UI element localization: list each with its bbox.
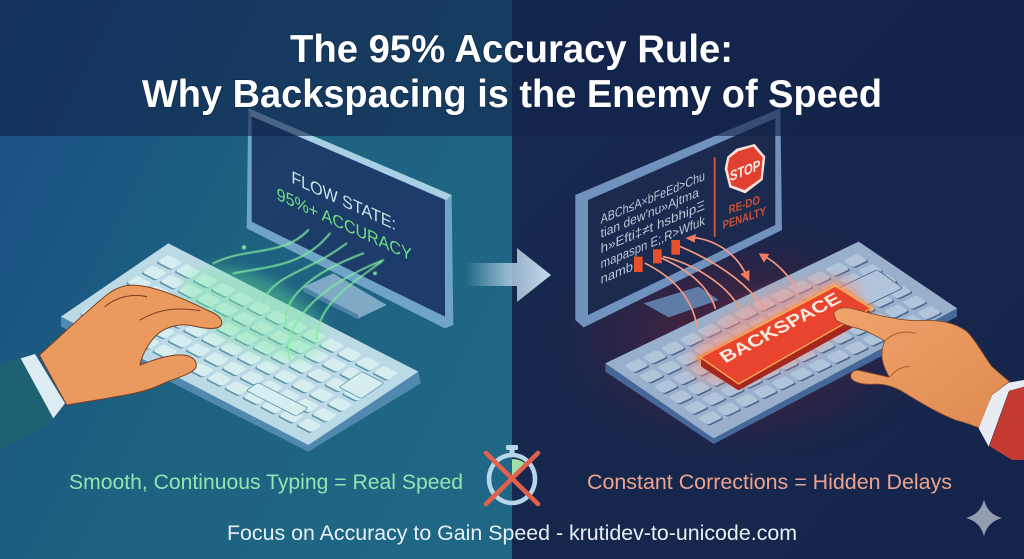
- right hand: [834, 308, 1009, 428]
- left panel background: [0, 0, 512, 559]
- left scene: flow state: [0, 108, 453, 452]
- caption: smooth typing: Smooth, Continuous Typing = Real Speed: [69, 471, 463, 494]
- garbled text line 1: ABCh≤A×bFeEd>Chu: [601, 168, 705, 227]
- garbled text line 5: namb: [601, 258, 633, 287]
- right keyboard: [605, 242, 957, 444]
- left keyboard: [61, 243, 421, 452]
- title band: [0, 0, 1024, 136]
- red correction arrows: [645, 234, 795, 327]
- stopwatch crossed out: [486, 445, 538, 504]
- right panel background: [512, 0, 1024, 559]
- left cuff: [21, 354, 65, 418]
- title: [142, 28, 882, 116]
- left hand: [39, 285, 222, 405]
- penalty label: PENALTY: [723, 204, 766, 232]
- garbled text line 2: tian dew'nu»Ajtma: [601, 184, 699, 241]
- sparkle icon: [966, 500, 1002, 536]
- stop sign: [725, 144, 765, 193]
- monitor text: accuracy: 95%+ ACCURACY: [277, 183, 412, 265]
- caption: corrections: Constant Corrections = Hidden Delays: [587, 471, 952, 494]
- right scene: re-do penalty: [575, 108, 1024, 460]
- stop sign: STOP: [730, 157, 761, 185]
- left sleeve: [0, 357, 53, 450]
- right sleeve: [989, 387, 1024, 460]
- backspace key: [695, 283, 875, 388]
- backspace key: BACKSPACE: [715, 288, 845, 366]
- left monitor: [247, 108, 453, 328]
- monitor text: flow state: FLOW STATE:: [291, 167, 396, 234]
- right monitor: [575, 108, 782, 327]
- error markers: [634, 240, 680, 272]
- green flow streaks: [213, 230, 383, 360]
- title: The 95% Accuracy Rule:: [290, 28, 733, 71]
- garbled text line 3: h»Efti‡≠t hsbhipΞ: [601, 197, 705, 256]
- right cuff: [979, 380, 1024, 447]
- footer: Focus on Accuracy to Gain Speed - krutidev-to-unicode.com: [227, 522, 797, 545]
- title: Why Backspacing is the Enemy of Speed: [142, 73, 882, 116]
- re-do label: RE-DO: [729, 192, 760, 217]
- center arrow: [465, 248, 551, 302]
- garbled text line 4: mapaspn E;,R>Wfuk: [601, 212, 705, 272]
